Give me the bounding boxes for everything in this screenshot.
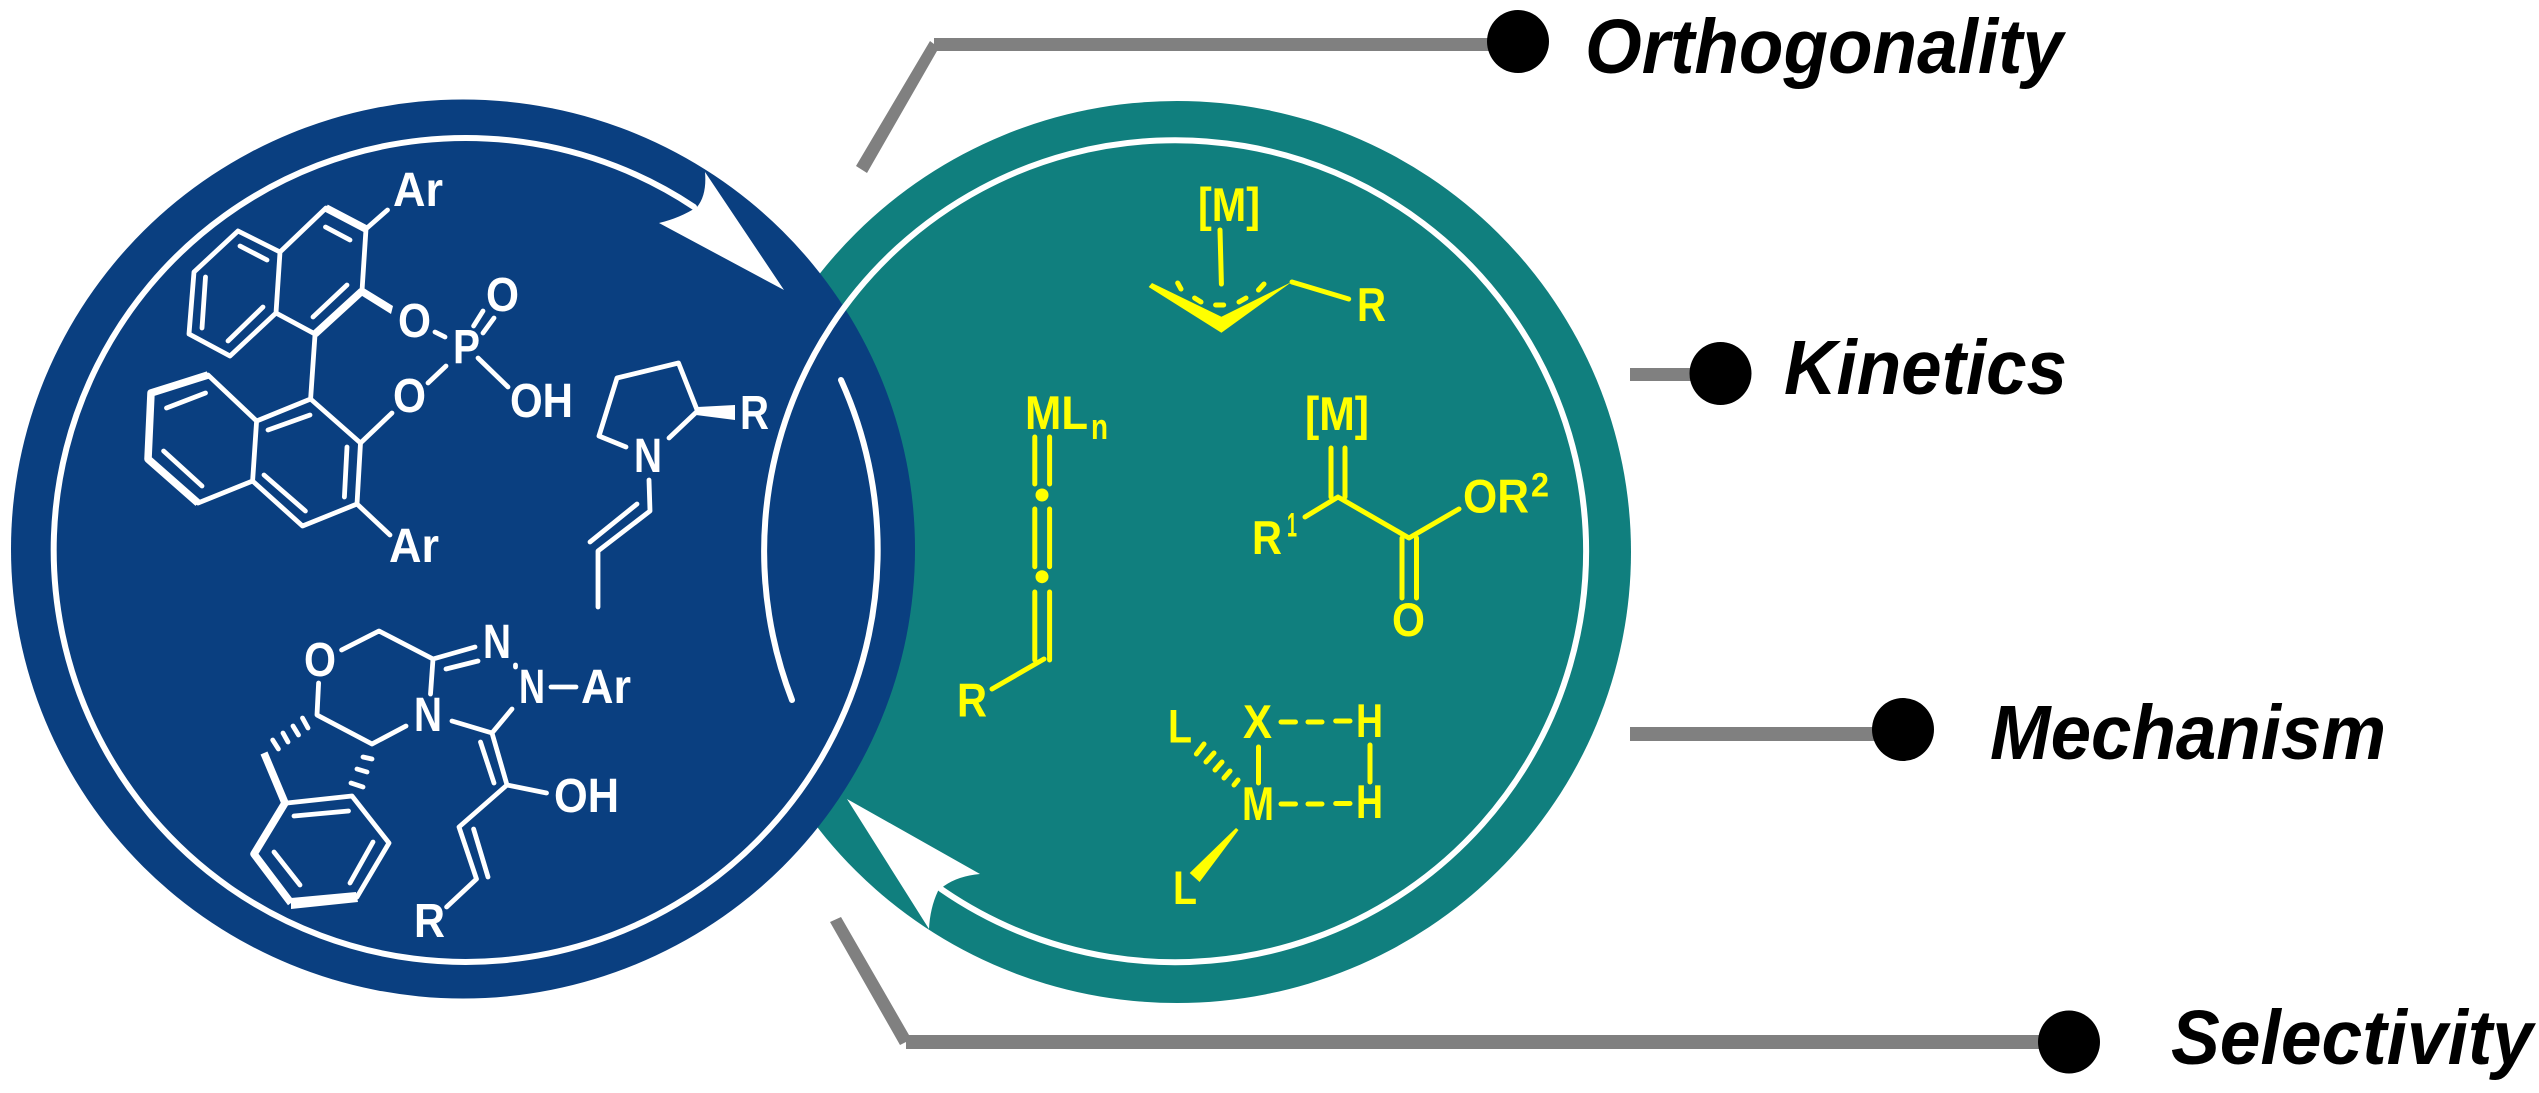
molecule: metal hydride transition state: L xyxy=(1173,861,1197,914)
molecule: BINOL phosphoric acid xyxy=(148,164,573,573)
connector: orthogonality line xyxy=(856,38,1490,173)
molecule: metal allyl complex: [M] xyxy=(1198,178,1260,231)
molecule: BINOL phosphoric acid: Ar xyxy=(393,164,443,217)
arrow: blue circle ring xyxy=(54,138,878,962)
molecule: metal vinylidene / allenylidene xyxy=(957,386,1108,727)
molecule: metal hydride transition state: H xyxy=(1356,775,1383,828)
molecule: triazolium enol: O xyxy=(304,634,336,687)
molecule: pyrrolidine enamine xyxy=(590,363,769,607)
arrow: teal circle ring xyxy=(764,140,1586,962)
molecule: pyrrolidine enamine: N xyxy=(634,430,662,483)
molecule: BINOL phosphoric acid: O xyxy=(398,295,431,348)
molecule: BINOL phosphoric acid: P xyxy=(453,321,480,374)
molecule: triazolium enol: N xyxy=(519,661,545,714)
panel: blue circle xyxy=(11,100,915,998)
molecule: BINOL phosphoric acid: Ar xyxy=(389,520,439,573)
connector: selectivity line xyxy=(830,917,2040,1049)
molecule: metal carbene ester xyxy=(1252,387,1549,646)
molecule: triazolium enol xyxy=(254,616,631,948)
molecule: metal hydride transition state: X xyxy=(1243,695,1272,748)
molecule: metal allyl complex xyxy=(1149,178,1386,333)
molecule: metal hydride transition state: L xyxy=(1168,700,1192,753)
icon: selectivity dot xyxy=(2038,1010,2100,1074)
molecule: metal vinylidene / allenylidene: n xyxy=(1091,406,1108,447)
label: kinetics: Kinetics xyxy=(1784,325,2067,411)
molecule: metal carbene ester: 1 xyxy=(1287,507,1297,545)
molecule: metal hydride transition state: M xyxy=(1242,777,1274,830)
molecule: metal allyl complex: R xyxy=(1357,278,1386,331)
molecule: BINOL phosphoric acid: OH xyxy=(510,375,573,428)
label: mechanism: Mechanism xyxy=(1990,690,2386,776)
icon: kinetics dot xyxy=(1690,342,1752,405)
molecule: triazolium enol: Ar xyxy=(581,661,631,714)
molecule: triazolium enol: OH xyxy=(554,770,619,823)
molecule: triazolium enol: N xyxy=(414,689,442,742)
molecule: metal carbene ester: R xyxy=(1252,511,1282,564)
molecule: BINOL phosphoric acid: O xyxy=(486,269,519,322)
molecule: metal carbene ester: OR xyxy=(1463,470,1529,523)
molecule: metal carbene ester: [M] xyxy=(1305,387,1369,440)
molecule: triazolium enol: N xyxy=(483,616,511,669)
molecule: metal carbene ester: O xyxy=(1392,593,1425,646)
molecule: metal vinylidene / allenylidene: ML xyxy=(1025,386,1088,439)
molecule: pyrrolidine enamine: R xyxy=(740,387,769,440)
molecule: metal hydride transition state xyxy=(1168,694,1383,914)
connector: mechanism line xyxy=(1630,727,1875,741)
label: orthogonality: Orthogonality xyxy=(1585,4,2067,90)
molecule: BINOL phosphoric acid: O xyxy=(393,370,426,423)
molecule: metal vinylidene / allenylidene: R xyxy=(957,674,987,727)
connector: kinetics line xyxy=(1630,368,1692,381)
molecule: metal hydride transition state: H xyxy=(1356,694,1383,747)
icon: orthogonality dot xyxy=(1487,10,1549,73)
panel: teal circle xyxy=(723,101,1631,1003)
molecule: metal carbene ester: 2 xyxy=(1531,467,1549,505)
icon: mechanism dot xyxy=(1872,698,1934,761)
molecule: triazolium enol: R xyxy=(414,895,445,948)
